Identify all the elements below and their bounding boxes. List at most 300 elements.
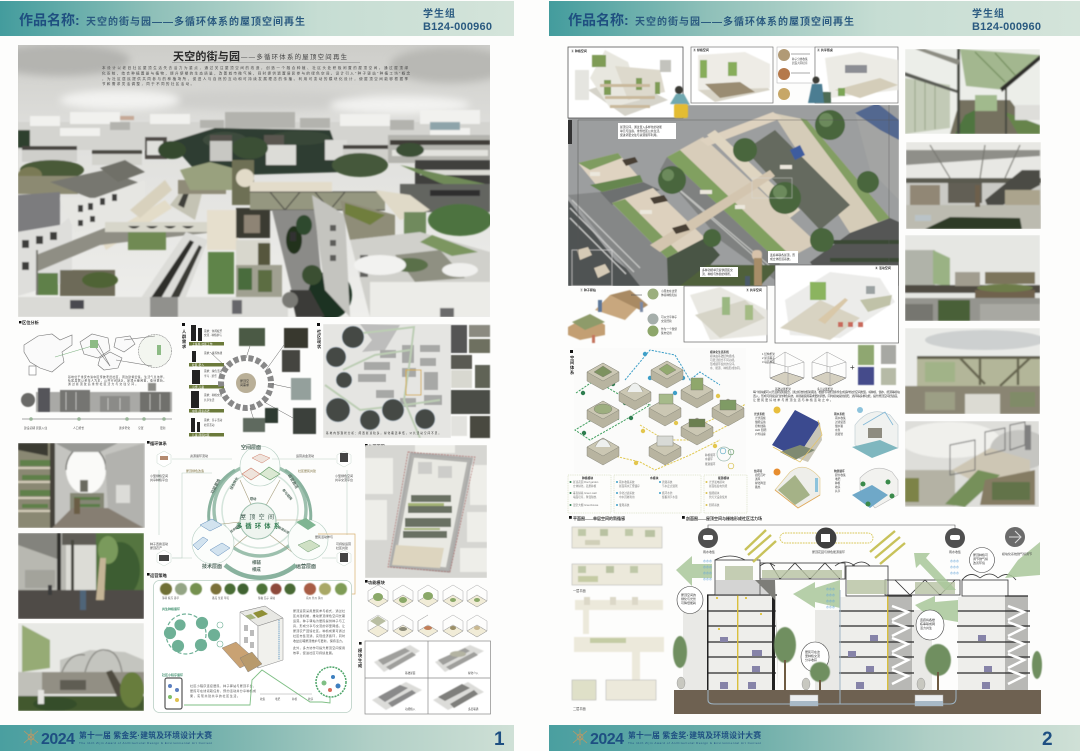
competition name: 第十一届 紫金奖·建筑及环境设计大赛 xyxy=(79,730,212,740)
operation description text: 区共建机制，推动屋顶绿色空间长期 xyxy=(293,613,345,618)
panel: rainwater module: 雨水收集 xyxy=(835,416,846,420)
panel: floor plans: 平面图——单层空间的新循感 xyxy=(573,515,625,521)
arc labels: 资源反馈 xyxy=(278,525,290,535)
seed station panel xyxy=(568,287,677,343)
panel: solar module: 光伏系统 xyxy=(754,412,765,416)
panel: rainwater module xyxy=(834,407,898,458)
panel: rainwater module: 滴灌管 xyxy=(835,432,843,436)
detail panel: scaffold space xyxy=(775,265,898,343)
seed station panel: 作为一个微型 xyxy=(661,327,677,331)
photos column page 2: truss bridge xyxy=(905,328,1040,414)
rainwater marks: 水水水 xyxy=(703,558,712,563)
development timeline xyxy=(22,417,172,430)
hero description text: 化系统，结合种植置景与植物，提升使楼的生态质量，改善城市微气候，同时提供退置居民参与的绿色空间。设计引入“种子驿站”种植工坊“概念 xyxy=(102,70,410,75)
page number 2: 2 xyxy=(1042,729,1053,750)
panel: circulation system diagram: 共享交流平台 xyxy=(335,477,353,482)
development timeline: 建设初期 居民入住 xyxy=(24,426,47,430)
panel: system legend boxes: 种植模块 xyxy=(582,476,593,480)
panel: neighbourhood map analysis xyxy=(317,323,490,438)
panel: operation plan: 番茄 生菜 草莓 xyxy=(212,596,229,600)
green airflow arrows xyxy=(676,542,1040,622)
development timeline: 逐步老化 xyxy=(119,426,130,430)
core circle: rooftop multi-cycle system xyxy=(236,503,280,539)
competition english name page 2: The 11th Zijin Award of Architectural Design & Environmental Art Contest xyxy=(628,741,761,745)
arc labels: 功能置换 xyxy=(209,478,221,494)
panel: system legend boxes: 滴灌系统 xyxy=(662,480,673,484)
competition english name: The 11th Zijin Award of Architectural Design & Environmental Art Contest xyxy=(79,741,212,745)
page number 1: 1 xyxy=(494,729,505,750)
side note: 模块由基础结构组成， xyxy=(710,354,737,358)
panel: isometric system diagram: 体 xyxy=(570,364,575,371)
central road and dark trees xyxy=(272,210,325,317)
seed icons panel xyxy=(777,47,815,100)
panel: shading module: 蓄热 xyxy=(755,485,761,489)
panel: system legend boxes: 雨水收集系统 xyxy=(619,480,635,484)
panel: shading module: 热环境 xyxy=(754,469,762,473)
panel: system legend boxes: 温室大棚 Greenhouse xyxy=(573,503,599,507)
detail panel: sharing table xyxy=(808,47,898,103)
seed station panel: 体验种植知识 xyxy=(661,293,677,297)
sun arrows xyxy=(745,530,905,564)
module description: 让居民更好地参与屋顶生活与种植活动之中。 xyxy=(753,397,833,402)
panel: building typology grid: 生 xyxy=(358,657,362,663)
panel: solar module: 光伏面板 xyxy=(755,416,766,420)
yellow loop xyxy=(780,533,873,543)
icon: weather nodes xyxy=(698,527,1025,548)
smartphone app: 社区小程序循环 xyxy=(162,672,183,677)
panel: circulation system diagram: 运营资金流动 xyxy=(296,453,314,458)
panel: section diagram: 剖面图——屋顶空间与栅格形成社区活力场 xyxy=(686,515,762,521)
panel: isometric system diagram: 水循环 xyxy=(705,457,713,461)
panel: crowd and needs: 需求：休闲娱乐 xyxy=(204,329,223,333)
arc labels: 相成 xyxy=(252,566,261,573)
footer bar page 2 xyxy=(549,725,1080,751)
panel: operation plan: 运营策略 xyxy=(150,572,168,579)
panel: section diagram: 模块化系统微气候调节 xyxy=(1002,551,1032,556)
interior photo 2: green wall atrium xyxy=(18,533,144,619)
panel: crowd and needs: 需 xyxy=(182,338,186,345)
rainwater marks: 水水水 xyxy=(950,570,959,575)
panel: operation plan: 南瓜 丝瓜 黄瓜 xyxy=(306,596,323,600)
group label page 2: 学生组 xyxy=(972,7,1005,20)
panel: crowd and needs: 社区·老人 xyxy=(192,363,204,367)
panel: site analysis: 区位分析 xyxy=(22,319,40,326)
panel: master plan xyxy=(365,443,487,578)
award logo icon xyxy=(24,729,38,745)
hero description text: 节和需求灵活调整，同于不同的社区活动。 xyxy=(102,81,194,86)
node: technology layer: 技术层面 xyxy=(202,563,222,570)
history sketch strip xyxy=(21,383,172,412)
panel: circulation system diagram: 种子置换活动 xyxy=(150,541,168,546)
street rails with white stripes xyxy=(128,232,208,317)
panel: biological cycle module xyxy=(834,468,898,508)
panel: shading module: 通风 xyxy=(755,477,761,481)
panel: isometric system diagram: 空 xyxy=(570,354,574,360)
people figures on axonometric xyxy=(745,250,762,286)
panel: section diagram: 连廊将各楼 xyxy=(920,617,935,622)
orange connector xyxy=(318,534,355,594)
panel: circulation system diagram: 小型绿植空间 xyxy=(150,473,168,478)
node: space layer: 空间层面 xyxy=(241,444,261,451)
project subtitle page 2: 天空的街与园——多循环体系的屋顶空间再生 xyxy=(635,15,854,28)
building 3 xyxy=(957,596,1030,690)
seed station panel: 小朋友在这里 xyxy=(661,289,677,293)
panel: neighbourhood map analysis: 社 xyxy=(317,328,322,335)
rainwater marks: 水水水 xyxy=(703,564,712,569)
panel: circulation system diagram: 居民活动参与 xyxy=(315,534,333,539)
axonometric callouts xyxy=(568,120,798,277)
panel: solar module: 控制线路 xyxy=(755,424,766,428)
node: technology layer xyxy=(192,519,234,570)
panel: building typology grid: 模 xyxy=(358,647,363,654)
panel: operation plan: 共生种植循环 xyxy=(162,606,180,611)
panel: section diagram: 屋顶种植可 xyxy=(973,552,988,557)
panel: isometric system diagram xyxy=(570,348,746,473)
operation description text: 效率，促进社区可持续发展。 xyxy=(293,650,335,655)
panel: isometric system diagram: 能源循环 xyxy=(705,462,716,466)
label 空间爆炸 xyxy=(568,120,572,144)
planting cycle xyxy=(164,614,223,654)
panel: section diagram: 屋顶花园与绿色能源循环 xyxy=(812,549,845,554)
panel: system legend boxes: 垂直绿墙 Green wall xyxy=(573,491,597,495)
seed station panel: 可以分享种子 xyxy=(661,315,677,319)
panel: system legend boxes: 照明系统 xyxy=(709,503,720,507)
panel: frame modules row: 1 结构框架 xyxy=(762,352,775,356)
panel: biological cycle module: 种植 xyxy=(835,481,841,485)
panel: isometric system diagram: 系 xyxy=(570,369,574,375)
panel: section diagram: 调节微气候 xyxy=(973,556,988,561)
panel: rainwater module: 储水箱 xyxy=(835,424,843,428)
interior photo 1: planted shelf corridor xyxy=(18,443,145,528)
panel: building typology grid: 功能植入 xyxy=(405,707,416,711)
panel: building typology grid: 基础屋面 xyxy=(405,671,416,675)
panel: frame modules row: 多元功能框架 xyxy=(817,387,833,391)
panel: section diagram: 雨水收集 xyxy=(703,549,715,554)
panel: system legend boxes: 光伏发电模块 xyxy=(709,480,725,484)
panel: crowd and needs: 需求：康养休憩 xyxy=(204,351,223,355)
photos column page 2: garden deck xyxy=(905,235,1040,321)
panel: system legend boxes: 循环水池 xyxy=(662,491,673,495)
panel: shading module xyxy=(754,467,820,508)
panel: frame modules row: 2 屋顶覆盖 xyxy=(762,356,775,360)
panel: system legend boxes: 储能模块 xyxy=(709,491,720,495)
panel: biological cycle module: 堆肥 xyxy=(835,477,841,481)
map of China and city locators xyxy=(24,334,172,375)
site analysis paragraph: 基地位于重庆市渝中区传统老旧社区，周边建筑密集，生活气息浓厚。 xyxy=(68,375,166,379)
panel: neighbourhood map analysis: 现 xyxy=(317,339,322,345)
site analysis paragraph: 通过屋顶改造重塑社区活力与交往空间。 xyxy=(68,382,138,386)
panel: biological cycle module: 物质循环 xyxy=(834,469,845,473)
seed station panel: ① 种子驿站 xyxy=(580,287,596,292)
panel: frame modules row: 基础功能框架 xyxy=(775,387,791,391)
panel: system legend boxes: 能源模块 xyxy=(718,476,729,480)
panel: frame modules row xyxy=(753,345,900,402)
arc labels: 联动 xyxy=(250,496,257,501)
olive label bars xyxy=(189,342,224,436)
panel: section diagram: 里种植交流 xyxy=(805,653,820,658)
rainwater marks: 水水水 xyxy=(826,592,835,597)
rooftop structures and truss bridges xyxy=(715,556,1016,596)
panel: section diagram: 绿化与光伏 xyxy=(681,596,696,601)
header bar page 2 xyxy=(549,1,1080,36)
development timeline: 空置 xyxy=(138,426,144,430)
panel: circulation system diagram: 屋顶绿色改造 xyxy=(186,468,204,473)
development timeline: 更新 xyxy=(160,426,166,430)
entry code page 1: B124-000960 xyxy=(423,21,492,33)
photos column page 2: sloped green wall xyxy=(905,421,1039,507)
panel: circulation system diagram: 小型绿色空间 xyxy=(335,473,353,478)
panel: circulation system diagram: 社区居民共建 xyxy=(298,468,316,473)
axonometric callouts: 连廊串联各屋顶，形 xyxy=(770,253,795,257)
panel: section diagram: 可降低能耗 xyxy=(681,600,696,605)
panel: shading module: 绿化降温 xyxy=(755,481,766,485)
panel: system legend boxes: 水模块 xyxy=(650,476,659,480)
panel: section diagram: 分享收获 xyxy=(805,657,817,662)
detail panel: planting space xyxy=(568,47,690,118)
add-on panels xyxy=(858,345,896,385)
core circle: rooftop multi-cycle system: 多循环体系 xyxy=(236,521,280,530)
mini triad legend xyxy=(717,447,734,469)
panel: system legend boxes: 灌溉系统 xyxy=(619,503,630,507)
panel: operation plan xyxy=(147,572,352,712)
callout 3 xyxy=(700,267,738,277)
distant skyline xyxy=(18,122,490,150)
photos column page 2: underside of canopy xyxy=(906,142,1041,229)
panel: functional modules: 功能模块 xyxy=(368,579,386,586)
panel: biological cycle module: 共享 xyxy=(835,489,841,493)
panel: circulation system diagram: 资源循环流动 xyxy=(190,453,208,458)
panel: crowd and needs: 需求：亲子活动 xyxy=(204,418,223,422)
panel: building typology grid: 成 xyxy=(358,662,363,669)
panel: crowd and needs: 中年·居家养老 xyxy=(192,409,210,413)
node: operation layer xyxy=(288,518,328,570)
iso modules xyxy=(587,361,744,465)
panel: building typology grid: 绿化介入 xyxy=(468,671,479,675)
panel: solar module xyxy=(754,406,822,462)
plant species row xyxy=(160,583,347,595)
operation description text xyxy=(293,608,345,655)
detail panel: workshop: ⑤ 共享空间 xyxy=(746,287,762,292)
panel: system legend boxes xyxy=(568,475,747,513)
axonometric callouts: 流、种植与休憩的场所。 xyxy=(702,272,733,276)
rainwater marks xyxy=(703,558,959,609)
panel: neighbourhood map analysis: 区 xyxy=(317,334,321,339)
panel: shading module: 遮阳百叶 xyxy=(755,473,766,477)
panel: circulation system diagram: 共享种植平台 xyxy=(150,477,168,482)
node: space layer xyxy=(240,444,280,486)
panel: floor plans: 一层平面 xyxy=(573,588,586,593)
panel: floor plans: 二层平面 xyxy=(573,706,586,711)
smartphone app xyxy=(162,670,330,709)
panel: operation plan: 薄荷 紫苏 香草 xyxy=(162,596,179,600)
top link line xyxy=(708,525,955,528)
panel: system legend boxes: 屋面板发电供能 xyxy=(709,484,728,488)
module description: 每个模块都可以灵活拆装和组合，通过标准化框架搭建，根据不同屋顶条件生成多样化的空间类型。将种植、储水、能源等模块 xyxy=(753,389,900,394)
exterior photo 3: garden steps and arched frame xyxy=(18,623,144,711)
operation description text: 运营。种子驿站为居民提供种子与工 xyxy=(293,618,345,623)
panel: building typology grid: 多层联通 xyxy=(468,707,479,711)
axonometric callouts: 屋顶空间，通过置入多样化的功能 xyxy=(620,125,662,129)
operation description text: 收益反哺屋顶维护与更新，保持活力。 xyxy=(293,638,345,643)
module description: 置入，形成可持续运行的绿色系统，并随着使用需求更新调整。同时模块提供遮阳、通风等多重功能，提升屋顶空间舒适度， xyxy=(753,393,900,398)
street trees xyxy=(673,627,1042,682)
hero title: 天空的街与园 xyxy=(173,49,240,63)
hero title xyxy=(172,49,360,63)
panel: operation plan: 收获 xyxy=(308,697,314,701)
panel: section diagram: 改善环境 xyxy=(973,560,985,565)
photos column page 2: canopy view xyxy=(905,49,1040,134)
panel: solar module: 户外插座 xyxy=(755,432,766,436)
panel: crowd and needs: 社区互动 xyxy=(204,423,215,427)
rainwater marks: 水水水 xyxy=(950,558,959,563)
panel: crowd and needs: 人 xyxy=(182,329,187,334)
footer bar page 1 xyxy=(0,725,514,751)
side note xyxy=(710,350,742,370)
development timeline: 人口增长 xyxy=(73,426,84,430)
seed station panel: 交流经验 xyxy=(661,319,672,323)
hero description text xyxy=(102,65,410,86)
panel: operation plan: 收集 xyxy=(260,697,266,701)
module description xyxy=(753,389,900,402)
people pictograms xyxy=(191,325,202,432)
hero description text: 本设计以老旧社区屋顶生活失去活力为重点，通过关注屋顶空间的改造，创造一个融合种植、社区头处积极闲置的屋顶空间。通过屋顶绿 xyxy=(102,65,409,70)
axonometric callouts: 多种功能单元提供居民交 xyxy=(702,268,733,272)
panel: operation plan: 种植 xyxy=(292,697,298,701)
operation description text: 具，形成分享与交流的邻里网络，让 xyxy=(293,623,345,628)
rainwater marks: 水水水 xyxy=(703,570,712,575)
left old buildings xyxy=(18,192,60,232)
seed station panel: 集市使用 xyxy=(661,331,672,335)
building 2 xyxy=(839,596,914,690)
hero subtitle: ——多循环体系的屋顶空间再生 xyxy=(241,52,348,61)
panel: rainwater module: 水泵 xyxy=(835,428,841,432)
axonometric callouts: 单元与连廊，重塑社区公共生活， xyxy=(620,129,662,133)
core circle: rooftop multi-cycle system: 屋顶空间 xyxy=(240,513,274,521)
axonometric building xyxy=(222,606,283,672)
arc labels xyxy=(209,472,300,573)
smartphone app: 居民可在线领取任务，预约活动并分享种植成 xyxy=(190,688,256,693)
side note: 模块化生态系统 xyxy=(710,350,729,354)
panel: frame modules row: 3 墙面界面 xyxy=(762,360,775,364)
panel: system legend boxes: 节水定点灌溉 xyxy=(662,484,678,488)
detail panel: scaffold space: ⑥ 活动空间 xyxy=(875,265,891,270)
group label page 1: 学生组 xyxy=(423,7,456,20)
panel: operation plan: 堆肥 xyxy=(275,697,281,701)
arc labels: 技术赋能 xyxy=(229,523,241,534)
arc labels: 运营激活 xyxy=(287,472,300,489)
panel: operation plan: 辣椒 茄子 青椒 xyxy=(258,596,275,600)
upper bridge xyxy=(250,192,385,210)
site photos around wheel xyxy=(239,328,316,434)
panel: building typology grid: 块 xyxy=(358,652,363,659)
arc labels: 绿色转化 xyxy=(228,476,240,490)
panel: system legend boxes: 立体绿化，蔬果种植 xyxy=(573,484,597,488)
panel: section diagram: 活力共生 xyxy=(920,625,932,630)
panel: crowd and needs: 需求：绿色活动 xyxy=(204,369,223,373)
panel: biological cycle module: 厨余收集 xyxy=(835,473,846,477)
panel: crowd and needs: 儿童·居民社区 xyxy=(192,433,210,437)
background facades xyxy=(683,610,932,690)
callout 2 xyxy=(768,251,798,263)
panel: section diagram: 雨水收集 xyxy=(949,549,961,554)
rainwater marks: 水水水 xyxy=(950,564,959,569)
operation description text: 屋顶运营采用居民参与模式，通过社 xyxy=(293,608,345,613)
detail panel: workshop xyxy=(684,286,767,342)
panel: section diagram xyxy=(673,515,1042,714)
panel: crowd and needs: 上班族·社区工作 xyxy=(192,342,213,346)
site analysis paragraph xyxy=(68,375,166,386)
side icons and labels xyxy=(157,451,351,566)
smartphone app: 果，实现共建共享的社区生活。 xyxy=(190,693,240,698)
panel: isometric system diagram: 间 xyxy=(570,359,574,366)
panel: section diagram: 栋串联成网 xyxy=(920,621,935,626)
detail panel: market space xyxy=(691,47,773,103)
smartphone app: 社区小程序连接居民、种子驿站与屋顶平台， xyxy=(190,683,256,688)
seed icons panel: 居民共同培育 xyxy=(792,61,808,65)
panel: solar module: LED 照明 xyxy=(755,428,767,432)
panel: crowd and needs xyxy=(182,323,316,437)
side note: 水、能源、种植形成协同。 xyxy=(710,366,742,370)
panel: crowd and needs: 交流 · 种植参与 xyxy=(204,333,222,337)
site photo column xyxy=(451,325,490,438)
panel: isometric system diagram: 种植循环 xyxy=(705,453,716,457)
panel: system legend boxes: 墙面培育，降温隔热 xyxy=(573,495,597,499)
node: operation layer: 运营层面 xyxy=(296,563,316,570)
operation description text: 社区市集流通，实现经济循环，同时 xyxy=(293,633,345,638)
panel: system legend boxes: 供灯光设备使用 xyxy=(709,495,728,499)
rainwater marks: 水水水 xyxy=(826,604,835,609)
header bar page 1 xyxy=(0,1,514,36)
side note: 形成循环使用的空间。 xyxy=(710,362,737,366)
panel: circulation system diagram: 循环体系 xyxy=(150,440,167,447)
ground xyxy=(674,690,1041,714)
panel: floor plans xyxy=(569,515,664,711)
needs wheel xyxy=(210,345,293,420)
needs wheel: 屋顶空 xyxy=(240,378,249,383)
arc labels: 参与链接 xyxy=(281,487,294,501)
panel: section diagram: 居民可在这 xyxy=(805,649,820,654)
cream arched roofs xyxy=(100,200,172,250)
year page 2: 2024 xyxy=(590,731,624,748)
spokes xyxy=(213,480,305,552)
hero rendering: rooftop street aerial view xyxy=(18,45,490,317)
panel: solar module: 储能设备 xyxy=(755,420,766,424)
panel: master plan: 总平面图 xyxy=(368,443,385,450)
project subtitle page 1: 天空的街与园——多循环体系的屋顶空间再生 xyxy=(86,15,305,28)
entry code page 2: B124-000960 xyxy=(972,21,1041,33)
panel: circulation system diagram xyxy=(147,440,355,594)
underground tanks and pipes xyxy=(708,590,956,706)
operation description text: 屋顶农产回馈社区。种植成果可通过 xyxy=(293,628,345,633)
rainwater marks: 水水水 xyxy=(703,576,712,581)
year: 2024 xyxy=(41,731,75,748)
panel: neighbourhood map analysis: 状 xyxy=(317,343,322,350)
panel: site analysis xyxy=(19,319,172,430)
axonometric callouts: 促进邻里交往与资源循环利用。 xyxy=(620,133,659,137)
panel: rainwater module: 雨水系统 xyxy=(834,412,845,416)
panel: system legend boxes: 中水回收利用 xyxy=(619,495,635,499)
panel: crowd and needs: 需求：种植交流 xyxy=(204,393,223,397)
speech bubbles xyxy=(677,548,994,672)
project title page 1: 作品名称: xyxy=(19,12,80,28)
panel: circulation system diagram: 屋顶农产 xyxy=(150,545,162,550)
site analysis paragraph: 社区居民以老年人为主，公共空间缺乏，屋顶大量闲置，亟待更新。 xyxy=(68,378,166,382)
panel: system legend boxes: 净化过滤系统 xyxy=(619,491,635,495)
panel: crowd and needs: 共享生活 xyxy=(204,398,215,402)
axonometric callouts: 成立体街道系统。 xyxy=(770,257,792,261)
operation description text: 此外，多方协作可提升屋顶空间使用 xyxy=(293,645,345,650)
rainwater marks: 水水水 xyxy=(826,586,835,591)
